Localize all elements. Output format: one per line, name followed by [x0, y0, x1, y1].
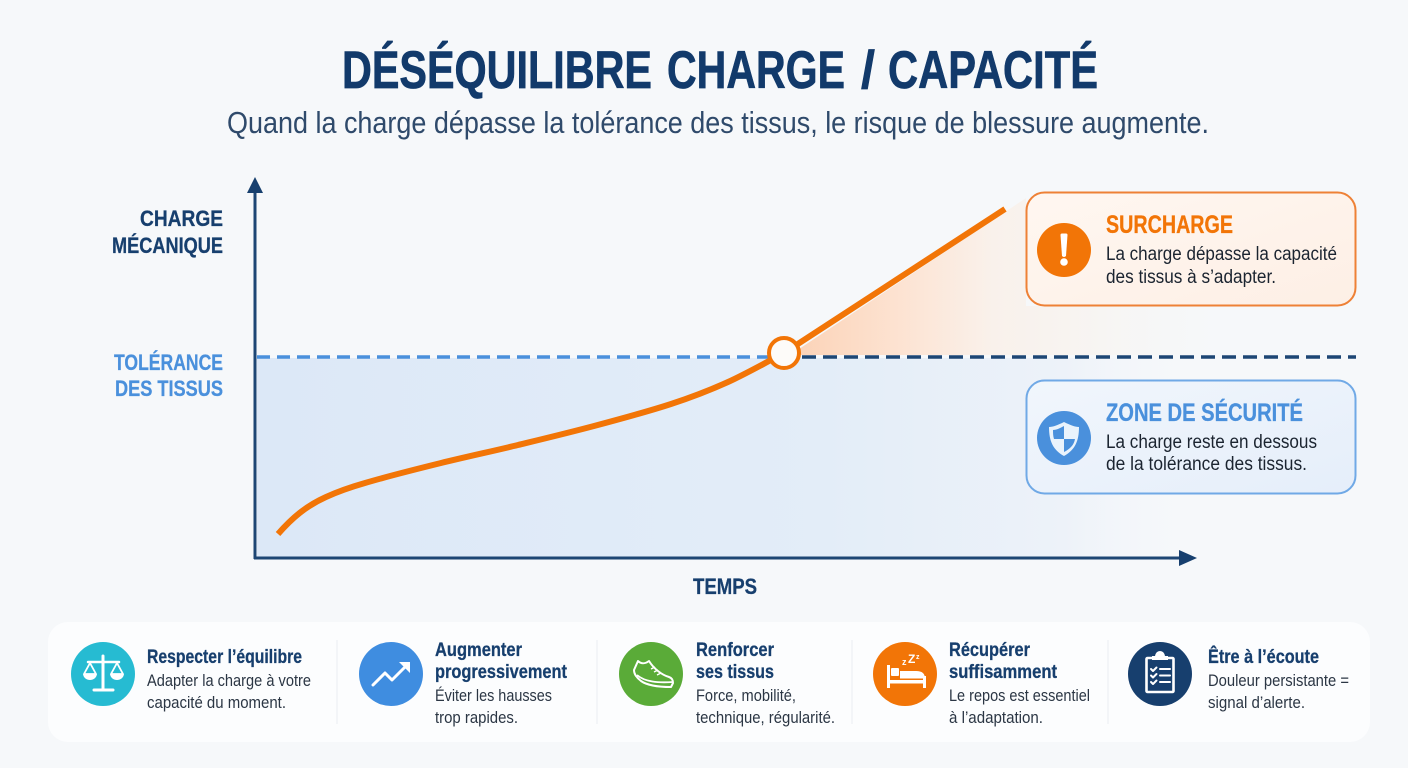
heading: Respecter l’équilibre — [147, 646, 302, 668]
overload zone fill — [790, 198, 1250, 355]
title: / — [861, 41, 875, 100]
heading: ses tissus — [696, 661, 774, 683]
description — [147, 671, 311, 712]
title: DÉSÉQUILIBRE — [342, 40, 652, 100]
y axis label: charge mécanique: CHARGE — [140, 206, 223, 231]
icon: scales — [71, 642, 135, 706]
description: trop rapides. — [435, 708, 518, 727]
description: Le repos est essentiel — [949, 686, 1090, 705]
description: Éviter les hausses — [435, 686, 552, 705]
heading — [949, 639, 1057, 683]
crossover marker — [769, 338, 799, 368]
chart — [247, 177, 1356, 566]
heading — [696, 639, 774, 683]
surcharge heading: SURCHARGE — [1106, 211, 1233, 239]
item: être à l'écoute — [1128, 642, 1349, 712]
heading: Renforcer — [696, 639, 774, 661]
heading: Être à l’écoute — [1208, 644, 1319, 668]
description: à l’adaptation. — [949, 708, 1043, 727]
zone text: La charge reste en dessous — [1106, 432, 1317, 453]
tolerance label: DES TISSUS — [115, 376, 223, 401]
tolerance label — [114, 350, 223, 401]
y axis — [247, 177, 263, 559]
panel: recommendations — [48, 622, 1370, 742]
icon: shoe — [619, 642, 683, 706]
heading: progressivement — [435, 661, 567, 683]
icon: bed: z — [916, 654, 920, 661]
icon: clipboard — [1128, 642, 1192, 706]
item: augmenter progressivement — [359, 639, 567, 727]
description: Douleur persistante = — [1208, 671, 1349, 690]
heading: Augmenter — [435, 639, 522, 661]
description — [435, 686, 552, 727]
title: CAPACITÉ — [888, 40, 1098, 100]
load curve — [278, 209, 1005, 534]
safe zone fill — [257, 358, 1207, 557]
icon: bed — [873, 642, 937, 706]
description — [949, 686, 1090, 727]
icon: warning — [1037, 223, 1091, 277]
subtitle: Quand la charge dépasse la tolérance des tissus, le risque de blessure augmente. — [227, 105, 1209, 140]
zone heading: ZONE DE SÉCURITÉ — [1106, 398, 1303, 427]
zone text — [1106, 432, 1317, 475]
surcharge text: des tissus à s’adapter. — [1106, 267, 1276, 288]
title: CHARGE — [667, 41, 845, 100]
y axis label: charge mécanique — [112, 206, 223, 258]
zone text: de la tolérance des tissus. — [1106, 454, 1307, 475]
tolerance dashed line, dark part — [802, 355, 1356, 359]
icon: shield — [1037, 411, 1091, 465]
heading: Récupérer — [949, 639, 1030, 661]
icon: bed: Z — [908, 652, 915, 666]
icon: rising arrow — [359, 642, 423, 706]
tolerance label: TOLÉRANCE — [114, 350, 223, 375]
icon: bed: z — [902, 657, 907, 667]
description: Adapter la charge à votre — [147, 671, 311, 690]
tolerance dashed line, blue part — [257, 355, 770, 359]
description: signal d’alerte. — [1208, 693, 1305, 712]
panel: surcharge — [1026, 192, 1356, 306]
description: Force, mobilité, — [696, 686, 796, 705]
description — [696, 686, 835, 727]
heading — [435, 639, 567, 683]
panel: zone de sécurité — [1026, 380, 1356, 494]
item: renforcer ses tissus — [619, 639, 835, 727]
description: capacité du moment. — [147, 693, 286, 712]
description — [1208, 671, 1349, 712]
description: technique, régularité. — [696, 708, 835, 727]
item: respecter l'équilibre — [71, 642, 311, 712]
surcharge text — [1106, 244, 1337, 288]
heading: suffisamment — [949, 661, 1057, 683]
title — [342, 40, 1098, 100]
surcharge text: La charge dépasse la capacité — [1106, 244, 1337, 265]
item: récupérer suffisamment — [873, 639, 1090, 727]
x axis — [254, 550, 1197, 566]
x axis label: TEMPS — [693, 574, 757, 599]
y axis label: charge mécanique: MÉCANIQUE — [112, 233, 223, 258]
